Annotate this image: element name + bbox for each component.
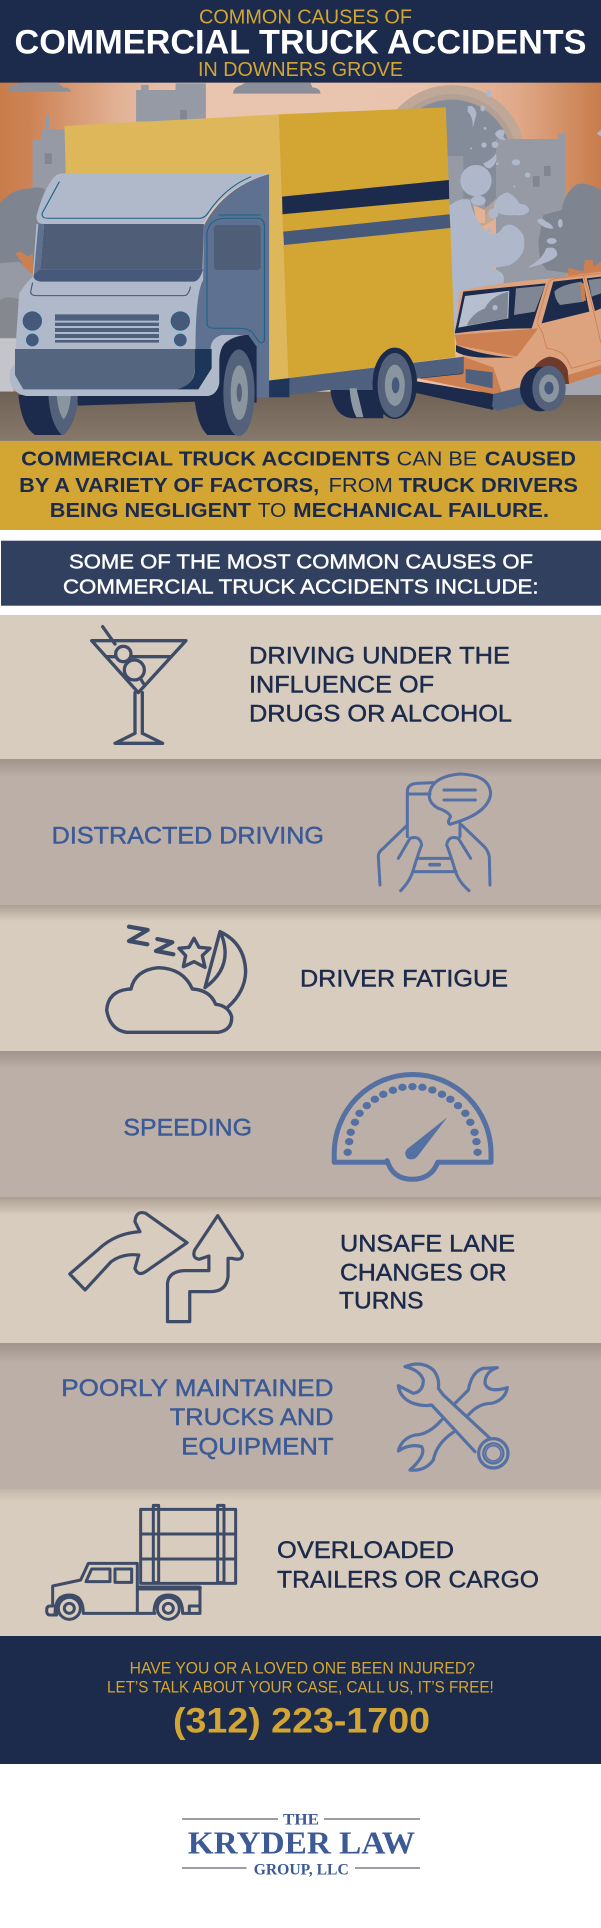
call to action footer — [0, 1636, 601, 1764]
main title: COMMERCIAL TRUCK ACCIDENTS — [14, 23, 586, 61]
icon: cloud, moon and star — [107, 927, 246, 1032]
label: TRUCKS AND — [170, 1404, 334, 1431]
label — [249, 642, 512, 728]
intro text band: TO — [258, 500, 286, 522]
intro text band: COMMERCIAL TRUCK ACCIDENTS — [21, 449, 390, 471]
row: overloaded trailers — [0, 1489, 601, 1636]
icon: crossed wrenches — [398, 1364, 508, 1470]
label: TRAILERS OR CARGO — [277, 1566, 539, 1594]
city background left — [0, 83, 601, 441]
rear wheels — [330, 348, 417, 419]
call to action footer: HAVE YOU OR A LOVED ONE BEEN INJURED? — [130, 1660, 475, 1678]
intro text band: BY A VARIETY OF FACTORS, — [19, 475, 319, 497]
row: poorly maintained trucks — [0, 1343, 601, 1489]
icon: phone in hands — [378, 774, 491, 891]
truck front: lights, grill, bumper and wheels — [10, 312, 257, 436]
intro text band: CAN BE — [397, 449, 477, 471]
intro text band: MECHANICAL FAILURE. — [293, 500, 549, 522]
row: unsafe lane changes — [0, 1197, 601, 1343]
intro text band: TRUCK DRIVERS — [399, 475, 578, 497]
smoke — [448, 90, 601, 338]
label: DRIVER FATIGUE — [300, 966, 508, 993]
intro text band: BEING NEGLIGENT — [50, 500, 252, 522]
logo: the Kryder Law Group: KRYDER LAW — [188, 1825, 415, 1861]
label: UNSAFE LANE — [340, 1230, 515, 1257]
title line: location: IN DOWNERS GROVE — [198, 59, 403, 81]
intro text band: FROM — [328, 475, 393, 497]
logo: the Kryder Law Group: GROUP, LLC — [254, 1861, 349, 1878]
logo: the Kryder Law Group: THE — [283, 1812, 319, 1828]
icon: overloaded pickup truck — [47, 1505, 236, 1619]
city background right — [378, 85, 601, 395]
box truck cargo — [64, 107, 464, 397]
label: TURNS — [339, 1287, 424, 1314]
title line: common causes of: COMMON CAUSES OF — [199, 6, 412, 28]
row: speeding — [0, 1051, 601, 1197]
logo: the Kryder Law Group — [182, 1812, 420, 1878]
call to action footer: LET’S TALK ABOUT YOUR CASE, CALL US, IT’S FREE! — [107, 1678, 494, 1696]
header banner — [0, 0, 601, 83]
illustration: truck and car collision — [0, 83, 601, 441]
row: distracted driving — [0, 759, 601, 905]
label: DRIVING UNDER THE — [249, 642, 510, 669]
crashed car — [410, 272, 601, 411]
label: INFLUENCE OF — [249, 672, 434, 699]
icon: speedometer — [334, 1074, 491, 1179]
label: EQUIPMENT — [181, 1433, 334, 1460]
label — [339, 1230, 515, 1314]
intro text band — [0, 441, 601, 530]
label: DISTRACTED DRIVING — [52, 822, 324, 849]
label — [61, 1375, 334, 1460]
truck cab — [15, 173, 269, 397]
label — [277, 1537, 539, 1594]
label: SPEEDING — [123, 1114, 252, 1141]
icon: martini glass — [92, 627, 186, 743]
section heading panel — [1, 541, 601, 606]
row: driving under the influence — [0, 615, 601, 759]
label: DRUGS OR ALCOHOL — [249, 701, 512, 728]
row: driver fatigue — [0, 905, 601, 1051]
icon: turn arrows — [70, 1213, 242, 1322]
section heading panel: SOME OF THE MOST COMMON CAUSES OF — [69, 550, 533, 573]
label: POORLY MAINTAINED — [61, 1375, 334, 1402]
phone number: (312) 223-1700 — [173, 1702, 430, 1741]
intro text band: CAUSED — [485, 449, 576, 471]
label: CHANGES OR — [340, 1259, 507, 1286]
label: OVERLOADED — [277, 1537, 454, 1564]
section heading panel: COMMERCIAL TRUCK ACCIDENTS INCLUDE: — [63, 575, 538, 598]
